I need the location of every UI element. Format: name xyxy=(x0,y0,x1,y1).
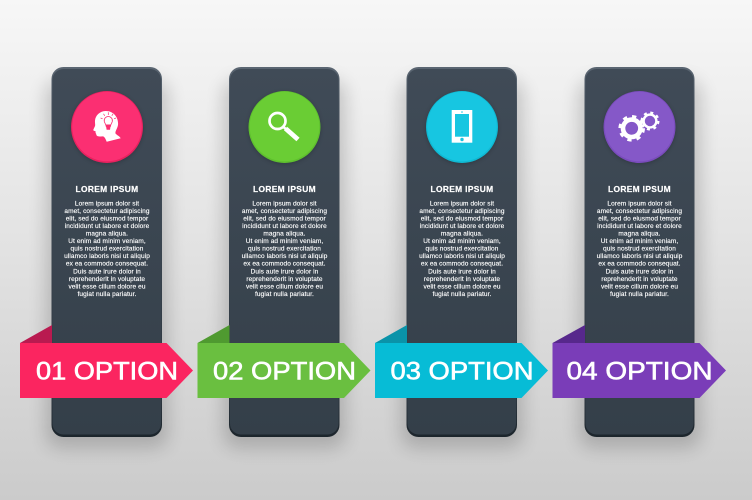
body text 3: reprehenderit in voluptate xyxy=(424,276,500,283)
card body 1 xyxy=(52,67,162,437)
body text 4: Lorem ipsum dolor sit xyxy=(607,200,672,207)
body text 4: amet, consectetur adipiscing xyxy=(597,208,682,215)
body text 4: reprehenderit in voluptate xyxy=(601,276,678,283)
ribbon label 4: 04 OPTION xyxy=(566,358,712,386)
body text 2: reprehenderit in voluptate xyxy=(246,276,323,283)
body text 3 xyxy=(419,200,505,298)
body text 2: ullamco laboris nisi ut aliquip xyxy=(242,253,328,260)
body text 4 xyxy=(597,200,683,298)
body text 3: incididunt ut labore et dolore xyxy=(420,223,505,230)
body text 2: quis nostrud exercitation xyxy=(248,246,321,253)
body text 1: Duis aute irure dolor in xyxy=(73,268,141,275)
panel: option 1 xyxy=(20,67,193,448)
body text 1 xyxy=(64,200,150,298)
body text 1: Lorem ipsum dolor sit xyxy=(75,200,139,207)
ribbon fold 4 xyxy=(552,325,585,344)
body text 4: magna aliqua. xyxy=(618,230,661,238)
body text 4: elit, sed do eiusmod tempor xyxy=(598,215,682,222)
body text 3: fugiat nulla pariatur. xyxy=(433,291,492,298)
body text 3: Lorem ipsum dolor sit xyxy=(430,200,494,207)
body text 1: incididunt ut labore et dolore xyxy=(65,223,150,230)
body text 1: amet, consectetur adipiscing xyxy=(64,208,150,215)
ribbon fold 2 xyxy=(198,325,230,344)
card shadow 4 xyxy=(579,80,701,448)
body text 3: ullamco laboris nisi ut aliquip xyxy=(419,253,505,260)
card body 3 xyxy=(406,67,517,437)
body text 2: ex ea commodo consequat. xyxy=(243,261,326,268)
ribbon label 1: 01 OPTION xyxy=(36,358,178,386)
icon circle 1 xyxy=(71,91,143,164)
card shadow 2 xyxy=(224,80,346,448)
icon circle 2 xyxy=(248,91,320,164)
body text 3: ex ea commodo consequat. xyxy=(421,261,503,268)
icon: head with light bulb xyxy=(93,111,121,142)
body text 2: elit, sed do eiusmod tempor xyxy=(243,215,327,222)
ribbon 2 xyxy=(198,343,370,398)
ribbon 1 xyxy=(20,343,193,398)
body text 2: fugiat nulla pariatur. xyxy=(255,291,314,298)
heading 3: LOREM IPSUM xyxy=(431,184,493,194)
body text 3: Ut enim ad minim veniam, xyxy=(423,238,501,245)
body text 4: Ut enim ad minim veniam, xyxy=(601,238,678,245)
body text 2: magna aliqua. xyxy=(263,230,306,238)
body text 2: Lorem ipsum dolor sit xyxy=(252,200,317,207)
icon: gears xyxy=(620,113,658,140)
card body 4 xyxy=(584,67,694,437)
panel: option 2 xyxy=(198,67,370,448)
body text 2: incididunt ut labore et dolore xyxy=(242,223,327,230)
body text 1: ullamco laboris nisi ut aliquip xyxy=(64,253,150,260)
card shadow 3 xyxy=(401,80,523,448)
body text 1: magna aliqua. xyxy=(86,230,128,238)
ribbon fold 3 xyxy=(375,325,407,344)
body text 1: quis nostrud exercitation xyxy=(71,246,144,253)
body text 1: reprehenderit in voluptate xyxy=(69,276,145,283)
ribbon fold 1 xyxy=(20,325,52,344)
icon circle 3 xyxy=(426,91,498,164)
body text 4: Duis aute irure dolor in xyxy=(606,268,674,275)
card body 2 xyxy=(229,67,340,437)
heading 2: LOREM IPSUM xyxy=(253,184,316,194)
body text 2 xyxy=(242,200,328,298)
body text 1: Ut enim ad minim veniam, xyxy=(68,238,146,245)
heading 4: LOREM IPSUM xyxy=(608,184,671,194)
ribbon 4 xyxy=(552,343,726,398)
body text 4: incididunt ut labore et dolore xyxy=(597,223,682,230)
ribbon label 2: 02 OPTION xyxy=(213,358,356,386)
body text 3: amet, consectetur adipiscing xyxy=(419,208,505,215)
body text 3: Duis aute irure dolor in xyxy=(428,268,496,275)
body text 3: elit, sed do eiusmod tempor xyxy=(421,215,504,222)
ribbon 3 xyxy=(375,343,548,398)
icon: magnifier xyxy=(270,113,298,140)
panel: option 4 xyxy=(552,67,726,448)
body text 1: fugiat nulla pariatur. xyxy=(78,291,137,298)
body text 2: amet, consectetur adipiscing xyxy=(242,208,327,215)
ribbon label 3: 03 OPTION xyxy=(390,358,534,386)
body text 3: magna aliqua. xyxy=(441,230,483,238)
body text 1: velit esse cillum dolore eu xyxy=(68,283,146,290)
icon circle 4 xyxy=(604,91,676,164)
panel: option 3 xyxy=(375,67,548,448)
body text 3: velit esse cillum dolore eu xyxy=(423,283,501,290)
body text 1: ex ea commodo consequat. xyxy=(66,261,148,268)
body text 3: quis nostrud exercitation xyxy=(426,246,499,253)
card shadow 1 xyxy=(46,80,168,448)
body text 4: ullamco laboris nisi ut aliquip xyxy=(597,253,683,260)
icon: smartphone xyxy=(452,110,472,143)
body text 4: velit esse cillum dolore eu xyxy=(601,283,678,290)
body text 4: quis nostrud exercitation xyxy=(603,246,676,253)
body text 2: velit esse cillum dolore eu xyxy=(246,283,323,290)
body text 2: Duis aute irure dolor in xyxy=(251,268,319,275)
body text 1: elit, sed do eiusmod tempor xyxy=(66,215,149,222)
heading 1: LOREM IPSUM xyxy=(76,184,138,194)
body text 4: ex ea commodo consequat. xyxy=(598,261,681,268)
body text 4: fugiat nulla pariatur. xyxy=(610,291,669,298)
body text 2: Ut enim ad minim veniam, xyxy=(246,238,323,245)
